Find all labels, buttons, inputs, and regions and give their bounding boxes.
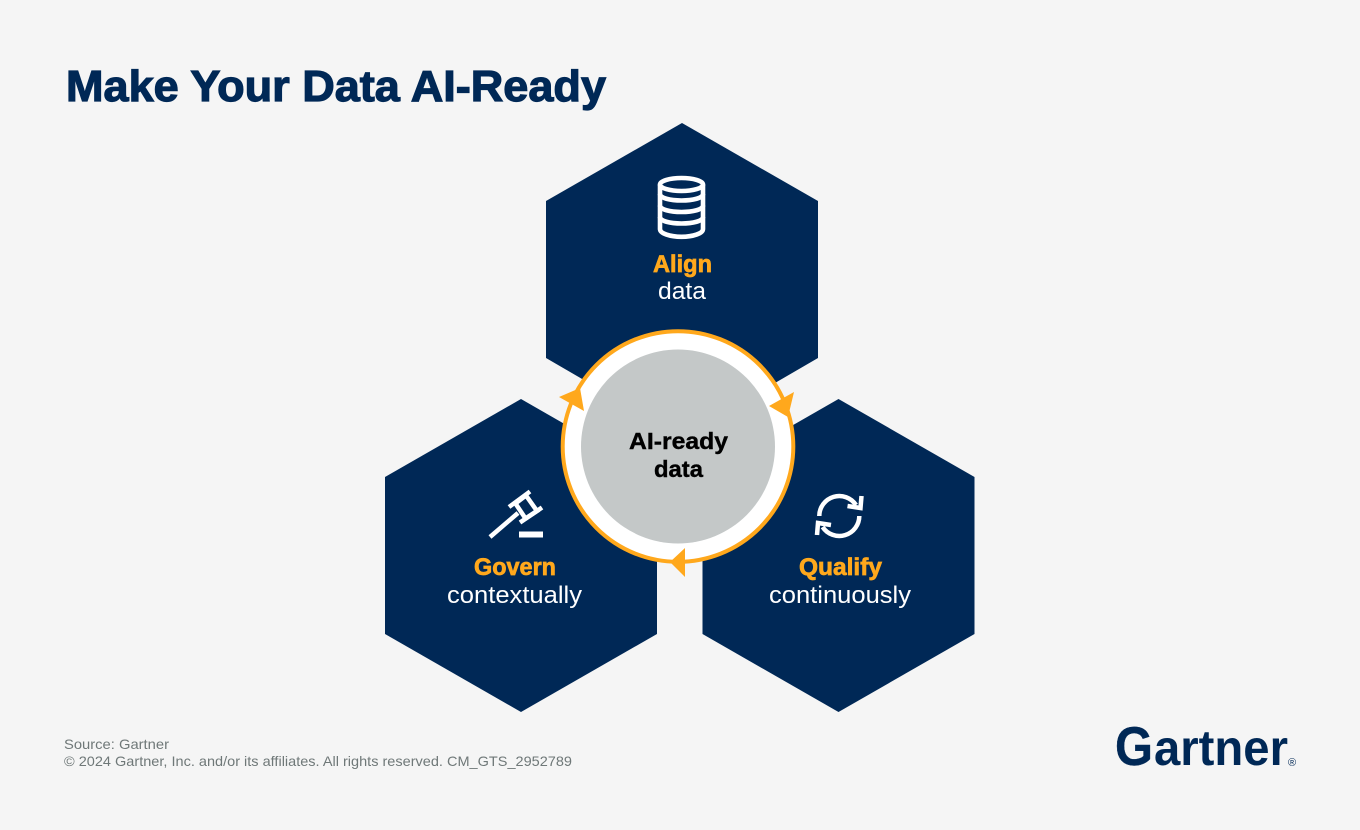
panel: align hexagon xyxy=(546,123,818,437)
arrow: upper left xyxy=(559,388,584,411)
arrow: upper right xyxy=(769,392,794,417)
label: AI-ready: AI-ready xyxy=(629,428,728,454)
label: data: data xyxy=(658,278,707,305)
label: data: data xyxy=(654,456,703,482)
label: govern: Govern xyxy=(474,554,556,581)
source note xyxy=(64,736,572,769)
icon: database xyxy=(660,178,703,237)
label: continuously: continuously xyxy=(769,582,911,609)
source note: Source: Gartner xyxy=(64,736,169,752)
panel: govern hexagon xyxy=(385,399,657,712)
label: align: Align xyxy=(653,251,712,278)
label: contextually: contextually xyxy=(447,582,582,609)
Gartner logo: ® xyxy=(1288,757,1296,769)
label: qualify: Qualify xyxy=(799,554,883,581)
Gartner logo: artner xyxy=(1154,720,1288,776)
icon: gavel xyxy=(490,492,543,538)
icon: refresh arrows xyxy=(817,496,862,536)
panel: qualify hexagon xyxy=(702,399,974,712)
arrow: bottom xyxy=(670,548,685,577)
Gartner logo: G xyxy=(1115,715,1153,777)
source note: © 2024 Gartner, Inc. and/or its affiliates. All rights reserved. CM_GTS_2952789 xyxy=(64,753,572,769)
title: Make Your Data AI-Ready xyxy=(66,62,607,111)
center circle: AI-ready data xyxy=(559,331,794,577)
